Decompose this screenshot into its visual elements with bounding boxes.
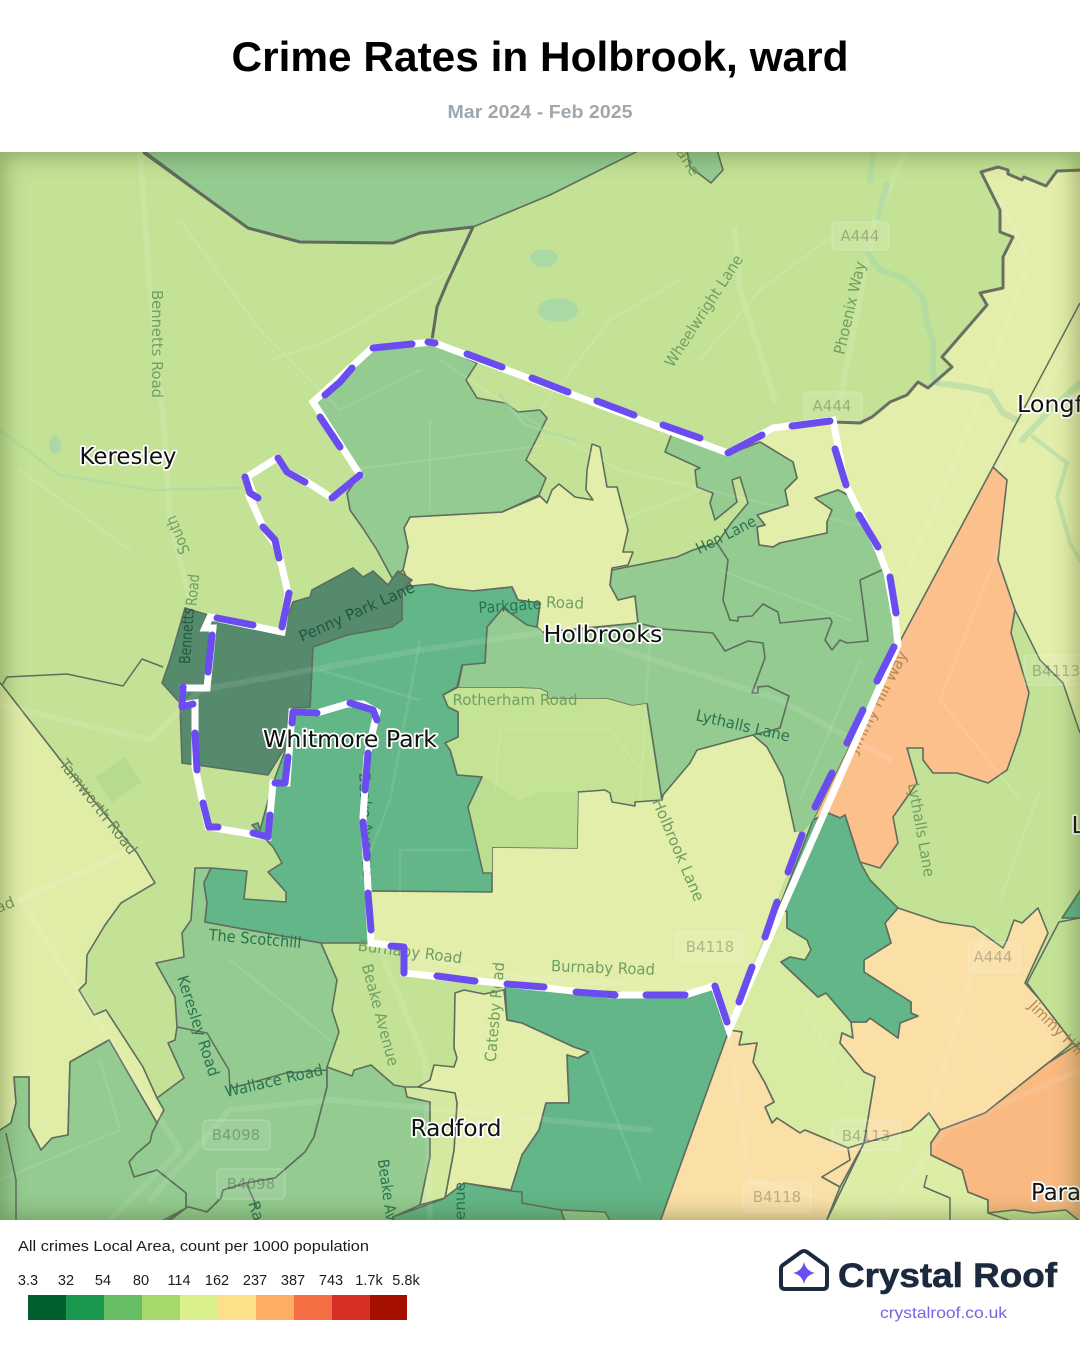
shield: B4118 south (743, 1182, 811, 1212)
map roads (0, 152, 1080, 1220)
zone: pale north-east pocket (752, 424, 846, 546)
label: Rotherham Road: Rotherham Road (452, 691, 578, 709)
label: Wheelwright Lane: Wheelwright Lane (661, 252, 747, 370)
label: Burnaby Road east: Burnaby Road (551, 957, 655, 979)
label: Road on Parkgate: Road (546, 593, 584, 613)
place: Keresley: Keresley (80, 444, 176, 470)
shield: A444: A444 (813, 397, 851, 415)
shield: B4098 south: B4098 (227, 1175, 275, 1193)
zone: peach small wedge (822, 1143, 864, 1187)
shield: B4098 (203, 1120, 270, 1150)
zone: north-west green area (143, 150, 640, 243)
zone: Beake Avenue south green (168, 1065, 430, 1222)
brand name: Crystal Roof (838, 1257, 1058, 1295)
road labels (0, 145, 1080, 1223)
legend values: 387 (281, 1273, 305, 1289)
subtitle: date range: Mar 2024 - Feb 2025 (448, 102, 632, 122)
label: Beake Av fragment: Beake Av (374, 1158, 400, 1222)
place: Radford: Radford (410, 1116, 502, 1142)
shield: A444 east (968, 942, 1020, 972)
zone: far bottom green (393, 1183, 565, 1222)
shield: B4118 south: B4118 (753, 1188, 801, 1206)
label: Beake Avenue north: Beake Avenue (355, 772, 377, 878)
legend values: 237 (243, 1273, 267, 1289)
map rivers (0, 152, 1080, 560)
label: Wallace Road: Wallace Road (223, 1061, 325, 1101)
label: Parkgate: Parkgate (478, 595, 542, 617)
shield: A444 north: A444 (841, 227, 879, 245)
place labels (80, 392, 1080, 1206)
label: Beake Avenue south: Beake Avenue (358, 962, 402, 1068)
label: Jimmy Hill Way: Jimmy Hill Way (844, 648, 911, 757)
zone: north residential green (313, 342, 547, 578)
legend values: 162 (205, 1273, 229, 1289)
zone: Radford pale (418, 990, 589, 1198)
north-west boundary line (143, 152, 473, 340)
place: Longford fragment: Longf (1017, 392, 1080, 418)
zone: peach south-west of A444 (660, 1030, 850, 1222)
brand logo (781, 1251, 1058, 1322)
zone: central south pale (371, 735, 803, 1028)
Holbrook ward boundary (182, 342, 898, 1030)
zone: east pale area (832, 167, 1080, 733)
label: Bennetts: Bennetts (176, 607, 198, 665)
legend title: All crimes Local Area, count per 1000 population (18, 1239, 369, 1255)
shield: B4113 east (1024, 655, 1080, 685)
label: The Scotchill: The Scotchill (207, 926, 302, 952)
map lakes (49, 249, 578, 454)
road shields (203, 222, 1080, 1212)
label: Phoenix Way: Phoenix Way (831, 260, 869, 356)
zone: Radford strip (405, 1087, 457, 1205)
label: Lythalls Lane east: Lythalls Lane (904, 782, 938, 878)
shield: B4098: B4098 (212, 1126, 260, 1144)
zone: far bottom light (561, 1210, 611, 1222)
zone: Keresley Road green (129, 868, 339, 1212)
zone: darkest green Penny Park (162, 568, 412, 775)
ward lines within Holbrooks (458, 433, 882, 832)
zone: Holbrooks large green (458, 433, 898, 832)
shield: A444 north (832, 222, 889, 250)
shield: A444 east: A444 (974, 948, 1012, 966)
shield: B4113 south (832, 1120, 900, 1150)
legend (18, 1239, 420, 1320)
title: Crime Rates in Holbrook, ward (232, 33, 848, 80)
zone: orange high crime area (813, 467, 1029, 868)
icon: house with star (781, 1251, 827, 1289)
zone: south green high-contrast block (505, 985, 730, 1222)
legend values: 1.7k (355, 1273, 383, 1289)
label: Burnaby Road west: Burnaby Road (357, 937, 463, 967)
zone: green mid-right block (779, 813, 918, 1038)
place: Holbrooks: Holbrooks (544, 622, 662, 648)
legend values: 5.8k (392, 1273, 420, 1289)
legend values: 54 (95, 1273, 111, 1289)
label: Penny Park Lane: Penny Park Lane (296, 578, 418, 646)
place: Whitmore Park: Whitmore Park (263, 727, 438, 753)
legend values: 114 (167, 1273, 191, 1289)
legend values (18, 1273, 420, 1289)
legend values: 743 (319, 1273, 343, 1289)
shield: A444 (804, 392, 862, 420)
legend colour scale (28, 1295, 407, 1320)
zone: deep orange corner (931, 1041, 1080, 1224)
zone: top small area (687, 150, 723, 183)
zone: Holbrooks Rotherham light area (443, 687, 662, 873)
shield: B4113 south: B4113 (842, 1127, 890, 1145)
label: Lythalls Lane: Lythalls Lane (694, 706, 792, 746)
zone: pale left (0, 680, 164, 1150)
label: Keresley Road: Keresley Road (173, 973, 223, 1079)
legend values: 80 (133, 1273, 149, 1289)
label: Bennetts Road: Bennetts Road (148, 290, 166, 398)
label: Holbrook Lane: Holbrook Lane (648, 796, 708, 904)
label: Road: Road (183, 573, 203, 607)
shield: B4098 south (217, 1169, 285, 1199)
brand url: crystalroof.co.uk (880, 1305, 1008, 1322)
label: South: South (162, 513, 194, 557)
zone: south-east pale (826, 1113, 1014, 1222)
shield: B4118 (676, 932, 744, 962)
legend values: 32 (58, 1273, 74, 1289)
zone: south-east inner pale (729, 908, 875, 1148)
label: Hen Lane: Hen Lane (693, 512, 759, 558)
legend values: 3.3 (18, 1273, 38, 1289)
shield: B4118: B4118 (686, 938, 734, 956)
zone: peach east (840, 908, 1073, 1143)
zone: right edge dark (1062, 888, 1080, 918)
map parkland patch (95, 757, 141, 803)
thin lines (2, 303, 1080, 1222)
shield: B4113 east: B4113 (1032, 662, 1080, 680)
label: Tamworth Road: Tamworth Road (55, 755, 141, 858)
choropleth map (0, 145, 1080, 1224)
label: Catesby Road: Catesby Road (482, 961, 508, 1063)
place: Para fragment: Para (1031, 1180, 1080, 1206)
label: Ra fragment: Ra (244, 1199, 268, 1223)
label: enue fragment: enue (451, 1182, 469, 1220)
zone: bottom-left green (0, 1040, 186, 1222)
zone: pale north centre (403, 444, 638, 635)
label: Lane fragment: ane (672, 145, 704, 179)
east boundary line (833, 167, 1080, 423)
zone: Whitmore Park green (204, 584, 540, 945)
